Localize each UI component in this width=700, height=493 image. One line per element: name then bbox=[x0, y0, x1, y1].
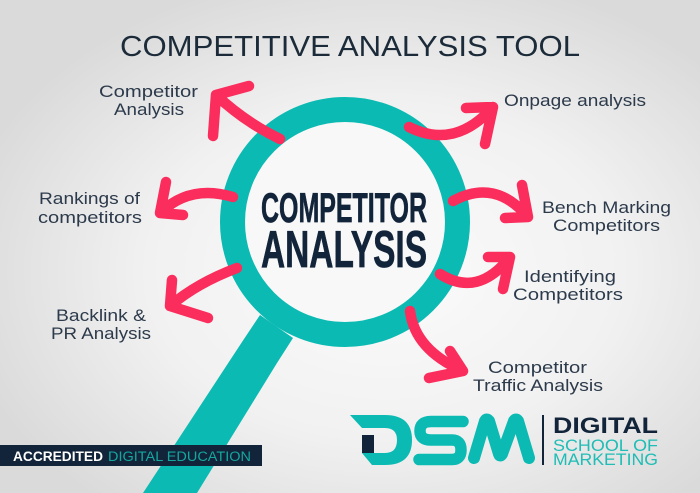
logo divider bbox=[542, 415, 544, 465]
arrow: traffic bbox=[410, 311, 463, 378]
accreditation banner: DIGITAL EDUCATION bbox=[108, 449, 251, 464]
logo wordmark: SCHOOL OF bbox=[553, 436, 658, 455]
label: bench marking: Competitors bbox=[553, 216, 660, 235]
arrows bbox=[160, 86, 528, 378]
label: identifying bbox=[513, 267, 623, 304]
logo letter M bbox=[474, 420, 529, 458]
label: competitor analysis bbox=[99, 82, 198, 119]
label: rankings: Rankings of bbox=[39, 189, 140, 208]
arrow: bench marking bbox=[453, 185, 528, 218]
accreditation banner: ACCREDITED bbox=[13, 449, 103, 464]
label: backlink: Backlink & bbox=[56, 306, 147, 325]
arrow: backlink bbox=[170, 268, 237, 318]
logo D square bbox=[362, 435, 374, 453]
label: competitor analysis: Competitor bbox=[99, 82, 198, 101]
label: onpage: Onpage analysis bbox=[504, 91, 646, 110]
label: backlink bbox=[51, 306, 151, 343]
logo letter D bbox=[350, 415, 412, 465]
logo wordmark bbox=[553, 413, 658, 469]
label: backlink: PR Analysis bbox=[51, 324, 151, 343]
logo letter S bbox=[419, 422, 463, 460]
accreditation banner bbox=[0, 445, 262, 466]
label: competitor analysis: Analysis bbox=[114, 100, 184, 119]
centre heading: COMPETITOR bbox=[261, 184, 427, 231]
label: traffic bbox=[473, 358, 603, 395]
label: traffic: Competitor bbox=[488, 358, 587, 377]
DSM logo bbox=[350, 413, 658, 469]
centre heading: ANALYSIS bbox=[261, 221, 427, 279]
label: bench marking bbox=[542, 198, 671, 235]
centre heading bbox=[261, 184, 427, 279]
logo wordmark: MARKETING bbox=[553, 450, 658, 469]
title: COMPETITIVE ANALYSIS TOOL bbox=[120, 31, 580, 63]
arrow: onpage bbox=[409, 107, 493, 144]
label: traffic: Traffic Analysis bbox=[473, 376, 603, 395]
arrow: identifying bbox=[440, 257, 510, 289]
label: rankings bbox=[38, 189, 142, 227]
magnifier handle bbox=[143, 315, 293, 493]
arrow: rankings bbox=[160, 182, 233, 215]
label: identifying: Identifying bbox=[524, 267, 616, 286]
label: bench marking: Bench Marking bbox=[542, 198, 671, 217]
label: rankings: competitors bbox=[38, 208, 142, 227]
logo wordmark: DIGITAL bbox=[553, 413, 658, 438]
labels bbox=[38, 82, 671, 395]
arrow: competitor analysis bbox=[213, 86, 280, 139]
magnifier lens ring bbox=[232, 110, 458, 334]
magnifying glass bbox=[143, 110, 458, 493]
label: identifying: Competitors bbox=[513, 285, 623, 304]
